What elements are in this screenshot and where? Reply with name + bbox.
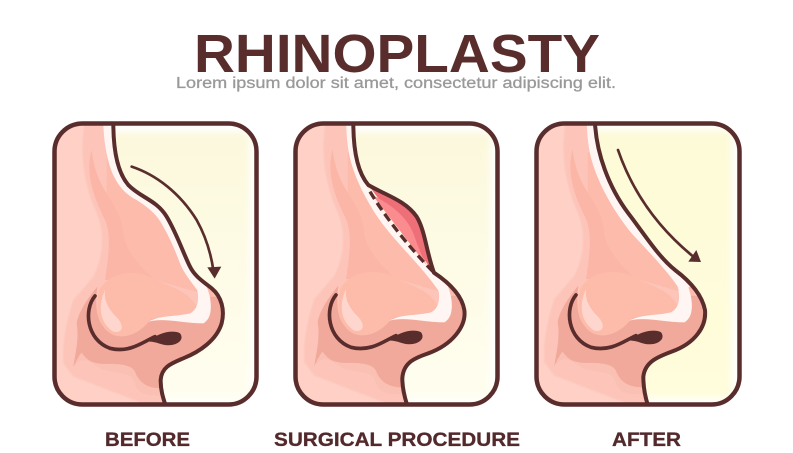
label: after: AFTER [612, 430, 681, 451]
removed hump: red [371, 188, 430, 266]
label: surgical procedure: SURGICAL PROCEDURE [274, 430, 520, 451]
label: before: BEFORE [105, 430, 190, 451]
nose outline: after [595, 123, 705, 407]
panel: surgical procedure [293, 121, 500, 407]
arrow: after [618, 150, 701, 262]
dashed cut line [370, 192, 434, 273]
title: RHINOPLASTY [194, 24, 600, 84]
panel: before [52, 121, 259, 407]
nose outline: surgical [353, 123, 465, 407]
nose outline: before [113, 123, 223, 407]
panel: after [534, 121, 742, 407]
subtitle: Lorem ipsum dolor sit amet, consectetur adipiscing elit. [176, 75, 616, 92]
arrow: before [132, 167, 221, 279]
